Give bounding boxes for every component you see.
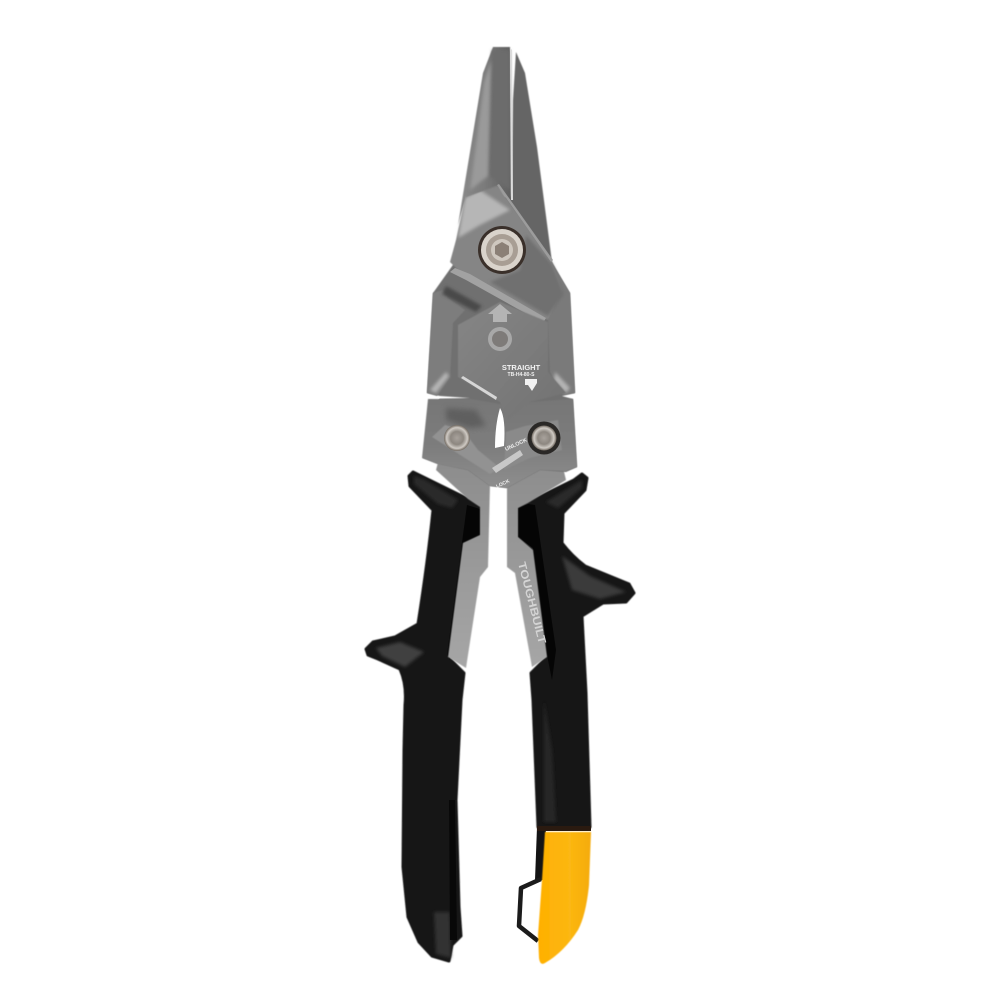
blade gap line (510, 48, 513, 200)
right metal shank with brand (507, 455, 566, 667)
head shading (490, 235, 564, 316)
model label: TB-H4-80-S (508, 372, 535, 378)
left rivet (444, 425, 470, 451)
head bolt (478, 226, 526, 274)
centre slot (495, 408, 504, 448)
left-right gaps between plates (424, 394, 441, 400)
arrow up icon (488, 304, 512, 322)
left handle inner groove (447, 505, 480, 660)
center hex plate (458, 302, 566, 420)
lock label: LOCK (495, 478, 511, 490)
right handle inner groove (518, 504, 556, 680)
left metal shank (436, 455, 490, 668)
hanging loop (519, 879, 541, 941)
right rivet (528, 422, 560, 454)
highlight facet (458, 190, 510, 238)
black collar (537, 826, 591, 831)
model label (502, 363, 541, 378)
right blade (510, 52, 552, 262)
right handle grip (518, 474, 634, 827)
yellow cap (538, 832, 591, 964)
left handle grip (366, 472, 480, 961)
head base silhouette (423, 196, 577, 488)
upper side plates (427, 265, 575, 396)
groove shadow (442, 286, 482, 312)
plate shadow (446, 408, 486, 428)
blade bevel shading (488, 50, 510, 190)
lower pivot plate (422, 399, 577, 490)
yellow grip tip (519, 826, 591, 964)
model label: STRAIGHT (502, 363, 541, 372)
lower black strip (535, 827, 546, 880)
blade highlight (470, 60, 491, 190)
brand text: TOUGHBUILT (515, 561, 548, 645)
hex bolt (488, 327, 512, 351)
latch highlights (492, 450, 523, 473)
left blade (458, 47, 511, 225)
right inset plate (504, 420, 562, 470)
left inset plate (432, 425, 500, 474)
brand mark icon (525, 379, 537, 391)
unlock label: UNLOCK (504, 437, 528, 453)
left handle highlights (376, 642, 424, 667)
right handle thumb highlight (562, 556, 626, 599)
blade head (450, 185, 564, 323)
